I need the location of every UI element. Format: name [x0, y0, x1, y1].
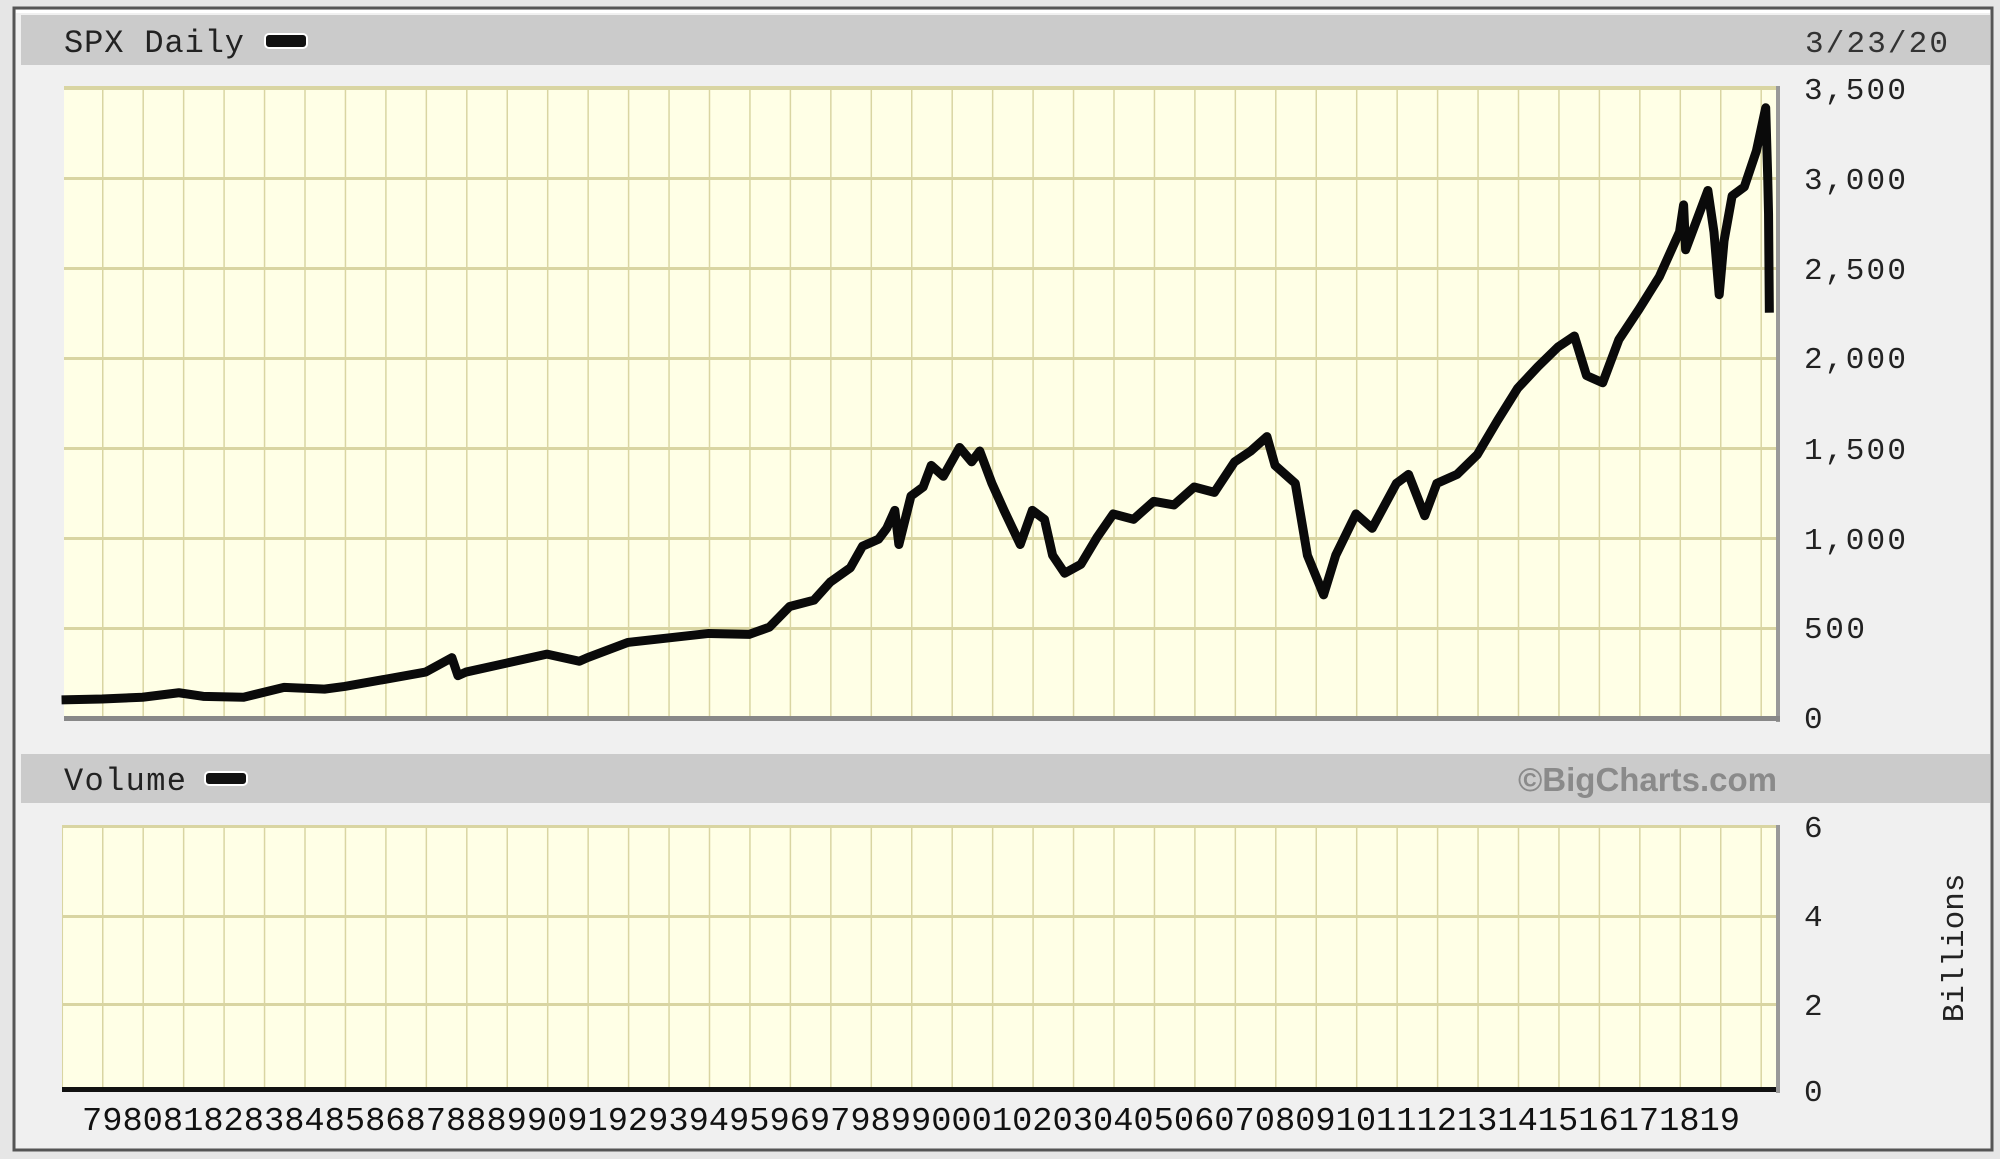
- y-axis labels: price: 3,500: [1804, 74, 1906, 109]
- chart: price plot: [62, 74, 1906, 738]
- legend: volume swatch: [205, 772, 247, 785]
- y-axis labels: volume: 4: [1804, 901, 1823, 936]
- y-axis labels: price: 3,000: [1804, 164, 1906, 199]
- date label: 3/23/20: [1805, 27, 1948, 62]
- legend: price line swatch: [265, 34, 307, 48]
- watermark: BigCharts: ©BigCharts.com: [1518, 761, 1777, 798]
- title: SPX Daily: SPX Daily: [64, 25, 244, 62]
- y-axis labels: price: 2,000: [1804, 343, 1906, 378]
- y-axis labels: price: 2,500: [1804, 254, 1906, 289]
- y-axis labels: price: 500: [1804, 613, 1865, 648]
- y-axis labels: price: [1804, 74, 1906, 738]
- y-axis labels: price: 0: [1804, 703, 1823, 738]
- y-axis labels: volume: 2: [1804, 990, 1823, 1025]
- x-axis labels: years: 7980818283848586878889909192939495969798990001020304050607080910111213141516171819: [82, 1103, 1740, 1140]
- y-axis labels: volume: [1804, 812, 1823, 1111]
- y-axis labels: price: 1,500: [1804, 434, 1906, 469]
- header: Volume band: [21, 754, 1990, 803]
- y-axis labels: volume: 0: [1804, 1076, 1823, 1111]
- chart: volume plot: [62, 812, 1973, 1111]
- header: SPX Daily band: [21, 15, 1990, 65]
- y-axis labels: price: 1,000: [1804, 524, 1906, 559]
- label: Volume: Volume: [64, 763, 186, 800]
- axis title: Billions: Billions: [1938, 874, 1973, 1022]
- y-axis labels: volume: 6: [1804, 812, 1823, 847]
- price line: [62, 108, 1769, 700]
